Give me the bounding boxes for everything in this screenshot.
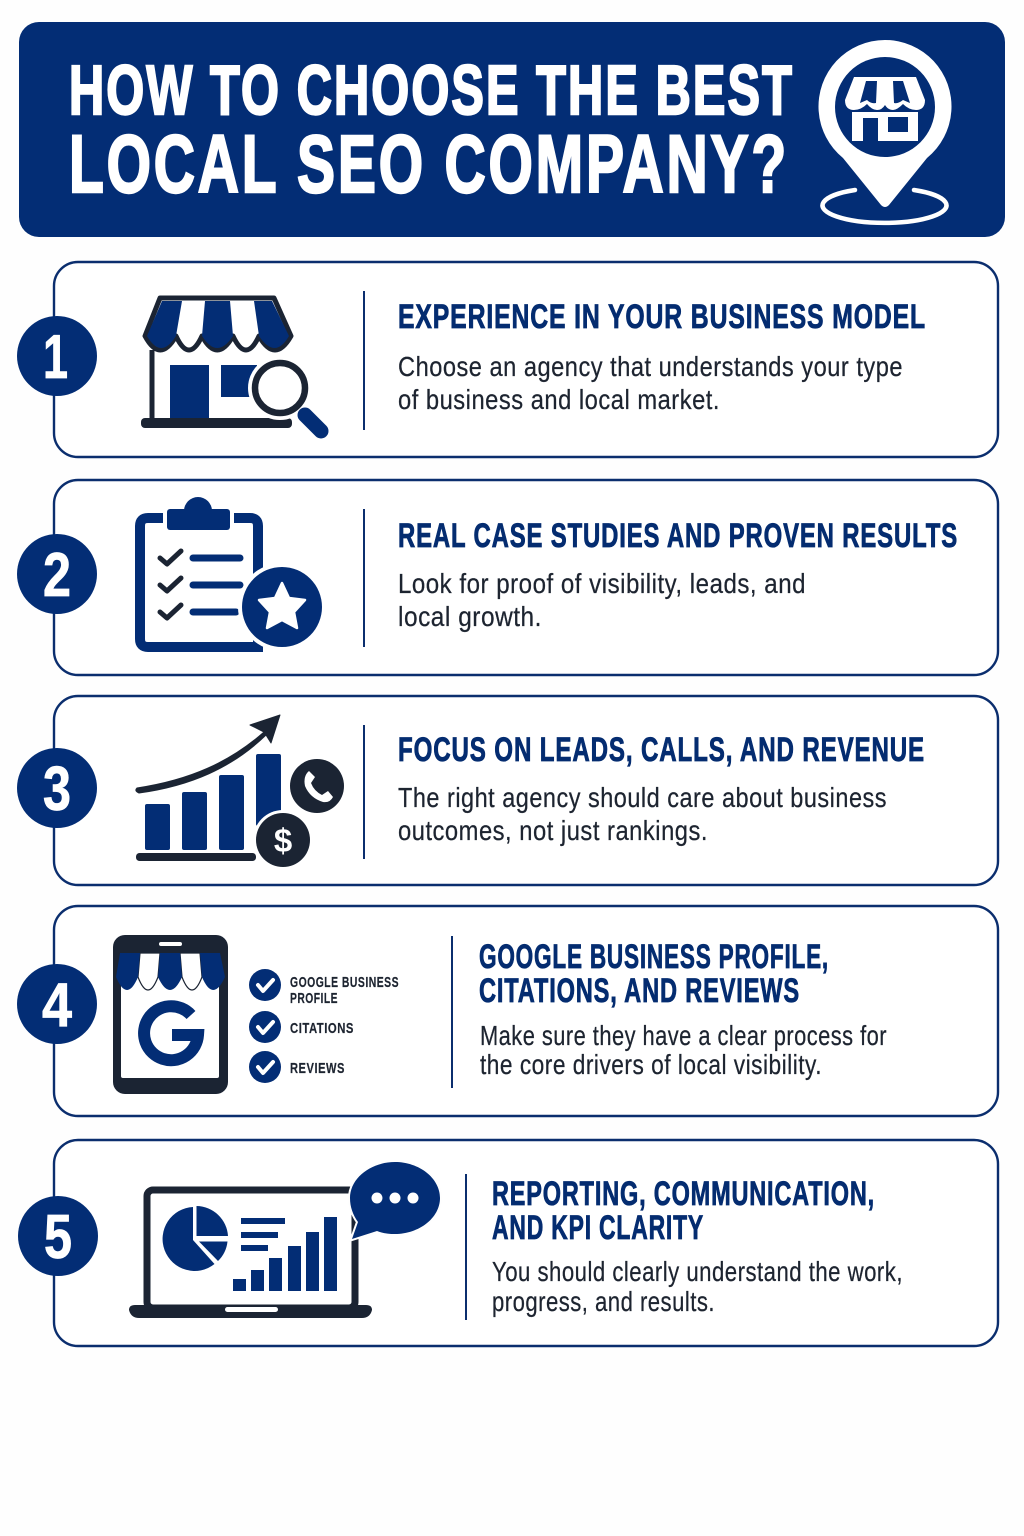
body text [398, 351, 903, 415]
icon: tablet storefront with G [113, 935, 228, 1094]
body text: the core drivers of local visibility. [480, 1049, 822, 1080]
checklist: CITATIONS [290, 1020, 354, 1037]
body text: of business and local market. [398, 384, 720, 415]
panel: real case studies and proven results [17, 480, 998, 675]
body text: The right agency should care about business [398, 782, 887, 813]
icon: map pin with storefront [819, 40, 952, 223]
icon: clipboard with star [140, 497, 326, 651]
heading [479, 938, 829, 1010]
checklist [249, 969, 399, 1083]
panel: focus on leads, calls, and revenue [17, 696, 998, 885]
body text: Look for proof of visibility, leads, and [398, 568, 806, 599]
body text [398, 782, 887, 846]
icon: growth chart with phone and dollar: $ [274, 822, 292, 859]
header banner [19, 22, 1005, 237]
body text: progress, and results. [492, 1286, 715, 1317]
checklist: REVIEWS [290, 1060, 345, 1077]
heading [492, 1175, 875, 1247]
body text: Choose an agency that understands your type [398, 351, 903, 382]
heading: GOOGLE BUSINESS PROFILE, [479, 938, 829, 976]
number badge 2: 2 [43, 541, 71, 610]
number badge 3: 3 [43, 755, 71, 824]
body text: local growth. [398, 601, 542, 632]
body text [480, 1020, 887, 1080]
body text: Make sure they have a clear process for [480, 1020, 887, 1051]
panel: experience in your business model [17, 262, 998, 457]
number badge 4 [17, 964, 97, 1044]
body text [492, 1256, 903, 1317]
title [69, 51, 794, 210]
number badge 5: 5 [44, 1203, 72, 1272]
number badge 3 [17, 748, 97, 828]
icon: laptop with charts and speech bubble [129, 1162, 440, 1318]
checklist: GOOGLE BUSINESS [290, 974, 399, 991]
body text: You should clearly understand the work, [492, 1256, 903, 1287]
number badge 1: 1 [43, 323, 68, 392]
number badge 5 [18, 1196, 98, 1276]
heading: AND KPI CLARITY [492, 1209, 704, 1247]
checklist: PROFILE [290, 990, 338, 1007]
number badge 2 [17, 534, 97, 614]
body text: outcomes, not just rankings. [398, 815, 708, 846]
heading: CITATIONS, AND REVIEWS [479, 972, 800, 1010]
number badge 1 [17, 316, 97, 396]
body text [398, 568, 806, 632]
number badge 4: 4 [42, 971, 72, 1040]
panel: google business profile, citations, and reviews [17, 906, 998, 1116]
icon: storefront with magnifier [141, 298, 321, 431]
icon: growth chart with phone and dollar [136, 715, 344, 870]
panel: reporting, communication, and KPI clarity [18, 1140, 998, 1346]
